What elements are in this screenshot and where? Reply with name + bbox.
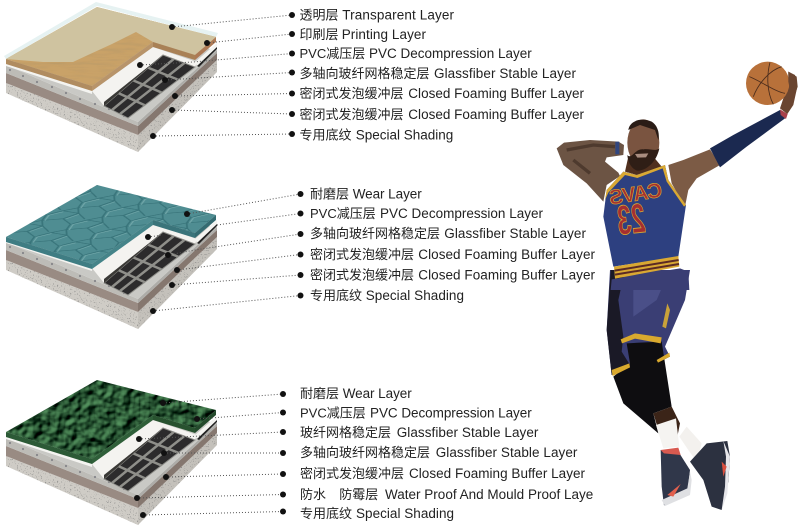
leader lines and dots: teal panel bbox=[145, 191, 304, 314]
label: special shading: Special Shading bbox=[356, 506, 454, 521]
label: PVC decompression layer: PVC减压层 bbox=[310, 206, 376, 221]
label: glassfiber stable layer: Glassfiber Stable Layer bbox=[444, 226, 586, 241]
label: multi-axis glassfiber stable layer: Glassfiber Stable Layer bbox=[436, 445, 578, 460]
label: printing layer: 印刷层 bbox=[300, 27, 339, 42]
player upper body: 23 bbox=[615, 196, 648, 244]
label: special shading: Special Shading bbox=[356, 128, 453, 142]
leader lines and dots: green panel bbox=[134, 391, 286, 518]
illustration: basketball player dunking bbox=[557, 62, 798, 510]
label: closed foaming buffer layer 1: 密闭式发泡缓冲层 bbox=[310, 247, 414, 262]
label: glassfiber stable layer: 多轴向玻纤网格稳定层 bbox=[300, 66, 430, 81]
player upper body: CAVS bbox=[608, 179, 664, 210]
label: closed foaming buffer layer 2: 密闭式发泡缓冲层 bbox=[300, 107, 404, 122]
label: PVC decompression layer: PVC减压层 bbox=[300, 46, 365, 61]
label: PVC decompression layer: PVC减压层 bbox=[300, 406, 366, 420]
label: closed foaming buffer layer 2: 密闭式发泡缓冲层 bbox=[310, 268, 414, 282]
label: PVC decompression layer: PVC Decompression Layer bbox=[370, 406, 532, 420]
label: PVC decompression layer: PVC Decompression Layer bbox=[380, 206, 544, 221]
player lower body bbox=[607, 270, 730, 510]
label: special shading: Special Shading bbox=[366, 288, 464, 303]
label: wear layer: Wear Layer bbox=[343, 386, 412, 401]
label: wear layer: 耐磨层 bbox=[300, 386, 339, 401]
label: water proof and mould proof layer: 防水 bbox=[300, 487, 326, 502]
label: multi-axis glassfiber stable layer: 多轴向玻纤网格稳定层 bbox=[300, 445, 430, 460]
label: closed foaming buffer layer: Closed Foaming Buffer Layer bbox=[409, 466, 586, 481]
label: transparent layer: Transparent Layer bbox=[342, 8, 454, 22]
label: glassfiber stable layer: Glassfiber Stable Layer bbox=[434, 66, 576, 81]
label: wear layer: Wear Layer bbox=[353, 186, 422, 202]
panel: floor sample with teal pebbled surface bbox=[6, 185, 596, 329]
label: closed foaming buffer layer 2: Closed Foaming Buffer Layer bbox=[408, 107, 584, 122]
layered floor cross-section: green bbox=[6, 380, 217, 525]
layered floor cross-section: wood bbox=[4, 2, 218, 152]
label: special shading: 专用底纹 bbox=[300, 506, 352, 521]
label: closed foaming buffer layer 1: Closed Foaming Buffer Layer bbox=[418, 247, 596, 262]
label: closed foaming buffer layer: 密闭式发泡缓冲层 bbox=[300, 466, 404, 481]
layered floor cross-section: teal bbox=[6, 185, 217, 329]
label: closed foaming buffer layer 2: Closed Foaming Buffer Layer bbox=[418, 268, 596, 282]
label: water proof and mould proof layer: 防霉层 bbox=[339, 487, 378, 502]
label: water proof and mould proof layer: Water Proof And Mould Proof Laye bbox=[385, 487, 593, 502]
player upper body bbox=[557, 62, 798, 290]
label: wear layer: 耐磨层 bbox=[310, 186, 349, 202]
label: glassfiber stable layer: 多轴向玻纤网格稳定层 bbox=[310, 226, 440, 241]
label: closed foaming buffer layer 1: Closed Foaming Buffer Layer bbox=[408, 86, 584, 101]
label: closed foaming buffer layer 1: 密闭式发泡缓冲层 bbox=[300, 86, 404, 101]
label: glassfiber stable layer: Glassfiber Stable Layer bbox=[397, 425, 539, 440]
label: special shading: 专用底纹 bbox=[310, 288, 362, 303]
leader lines and dots: wood panel bbox=[137, 12, 295, 139]
label: special shading: 专用底纹 bbox=[300, 128, 352, 142]
panel: floor sample with green textured surface bbox=[6, 380, 593, 525]
label: glassfiber stable layer: 玻纤网格稳定层 bbox=[300, 425, 391, 440]
label: PVC decompression layer: PVC Decompression Layer bbox=[369, 46, 532, 61]
label: transparent layer: 透明层 bbox=[300, 8, 339, 22]
panel: floor sample with printed wood surface bbox=[4, 2, 584, 152]
label: printing layer: Printing Layer bbox=[342, 27, 426, 42]
